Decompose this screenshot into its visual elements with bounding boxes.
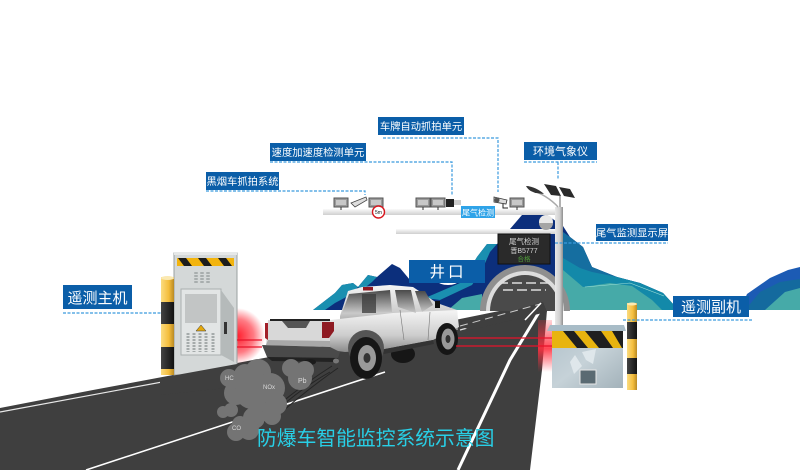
exhaust tips [333, 358, 339, 364]
mountains: centre range [313, 215, 674, 310]
inner door [181, 289, 221, 355]
tunnel entrance sign [409, 260, 485, 283]
door line [400, 310, 430, 340]
mirror [435, 301, 440, 308]
side windows [395, 290, 416, 313]
speed sign: 5m [375, 210, 382, 216]
label: weather station [524, 142, 597, 180]
lamp head [526, 186, 544, 194]
red laser glow: left [237, 308, 293, 364]
truck bed and side [330, 310, 459, 352]
label: smoke capture [206, 172, 365, 195]
solar panels [544, 184, 561, 196]
exhaust streaks [262, 366, 338, 424]
gantry pole [555, 207, 563, 325]
sign box [510, 198, 524, 210]
hazard stripe [552, 331, 623, 348]
title: 防爆车智能监控系统示意图 [257, 428, 494, 450]
tail lights [322, 322, 334, 338]
red laser beams [237, 338, 552, 347]
lane line: right solid [458, 309, 541, 470]
label: smoke capture: 黑烟车抓拍系统 [206, 175, 279, 188]
label: secondary unit: 遥测副机 [681, 299, 741, 316]
camera [446, 199, 461, 207]
gantry sign: exhaust detection: 尾气检测 [462, 208, 494, 218]
label: main unit [63, 285, 161, 313]
road foreground left of cabinet [160, 352, 300, 395]
sign box [416, 198, 430, 210]
front wheel [436, 323, 458, 355]
gantry crossbar lower [396, 229, 558, 234]
roadside display board: 合格 [518, 254, 531, 263]
lane line: left centre [86, 372, 385, 470]
camera [494, 197, 508, 208]
warning icon [196, 325, 206, 331]
pickup truck [262, 285, 459, 379]
label: weather station: 环境气象仪 [533, 144, 588, 158]
roadside display board [498, 234, 550, 264]
lamp arm [530, 190, 558, 207]
label: plate capture [378, 117, 498, 192]
pollutant labels: CO [232, 426, 241, 432]
red laser glow: right [538, 320, 552, 372]
sign box [431, 198, 445, 210]
sign box [369, 198, 383, 210]
reflection patch [570, 349, 596, 374]
left bollard [161, 276, 174, 375]
lower sill [380, 340, 434, 354]
indicator panel [580, 370, 596, 384]
rear window [342, 290, 392, 313]
lock [224, 322, 227, 334]
roadside display board: 尾气检测 [509, 236, 539, 246]
mountains: right range [740, 267, 800, 310]
exhaust smoke [217, 359, 314, 441]
dome camera [539, 215, 553, 230]
rear wheel [350, 337, 382, 379]
lane line: dashed centre [460, 308, 540, 330]
hazard stripe [177, 258, 234, 266]
street lamp and solar panels [526, 184, 575, 207]
speed sign [372, 206, 384, 218]
brake light [363, 287, 373, 290]
right roadside box [547, 325, 626, 388]
vents top [196, 272, 208, 283]
label: main unit: 遥测主机 [67, 290, 128, 307]
lane line: left edge [0, 363, 262, 412]
pollutant labels [225, 376, 307, 432]
camera [351, 197, 367, 207]
pollutant labels: NOx [263, 385, 275, 391]
label: speed unit: 速度加速度检测单元 [272, 146, 364, 159]
label: secondary unit [623, 296, 752, 320]
label: plate capture: 车牌自动抓拍单元 [380, 120, 462, 133]
vents bottom [188, 333, 213, 352]
box roof [547, 325, 626, 331]
sign box [334, 198, 348, 210]
tail panel [266, 320, 330, 347]
roadside display board: 晋B5777 [510, 247, 538, 255]
gantry crossbar upper [323, 209, 558, 215]
label: display screen: 尾气监测显示屏 [596, 226, 668, 240]
pollutant labels: HC [225, 376, 234, 382]
road [0, 302, 547, 470]
truck cab [340, 285, 458, 330]
label: display screen [555, 224, 668, 243]
bumper [262, 345, 340, 358]
cabinet body [174, 253, 237, 375]
box body [552, 331, 623, 388]
tunnel entrance sign: 井口 [429, 263, 467, 281]
label: speed unit [270, 143, 452, 196]
rear wheel arch [348, 330, 384, 366]
tunnel entrance [460, 265, 570, 330]
filter panel [185, 294, 217, 323]
devices on gantry [334, 197, 524, 218]
main host cabinet [174, 252, 237, 375]
right bollard [627, 302, 637, 390]
pollutant labels: Pb [298, 378, 307, 385]
far front wheel [391, 345, 415, 363]
